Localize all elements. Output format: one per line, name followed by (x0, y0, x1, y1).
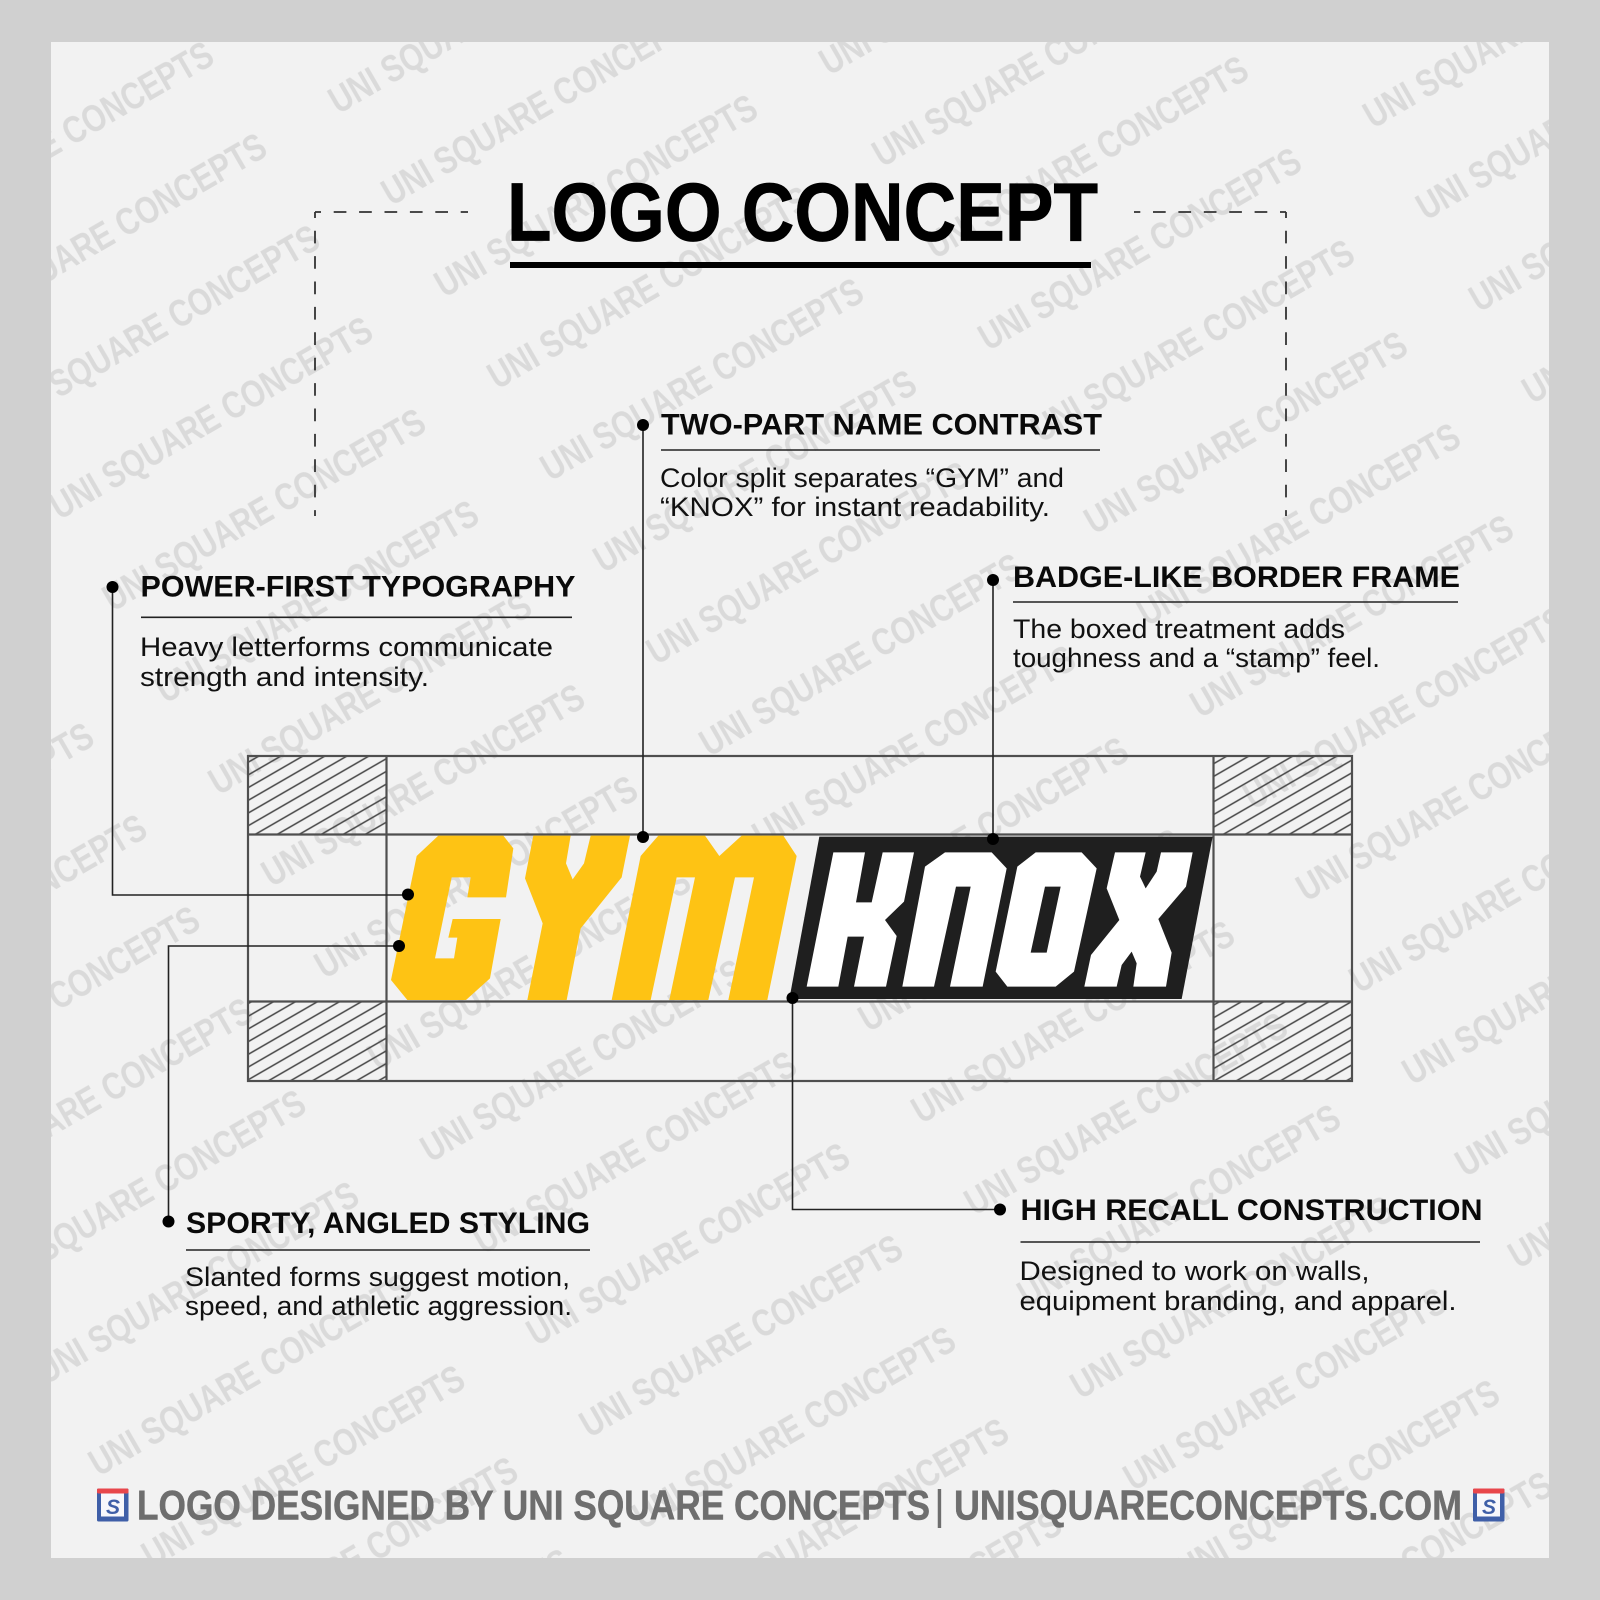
icon: left footer logo: S (106, 1496, 120, 1519)
callout: power-first typography (106, 570, 576, 900)
callout: badge-like border frame (987, 561, 1460, 845)
logo: KNOX badge (789, 837, 1213, 999)
callout: sporty, angled styling: SPORTY, ANGLED STYLING (186, 1207, 590, 1240)
callout: badge-like border frame: BADGE-LIKE BORDER FRAME (1013, 561, 1460, 594)
icon: left footer logo (97, 1488, 128, 1522)
construction grid (248, 756, 1352, 1081)
title: LOGO CONCEPT (507, 166, 1098, 258)
dashed bracket: right (1134, 212, 1286, 516)
callout: high recall construction (786, 992, 1482, 1316)
callout: two-part name contrast: “KNOX” for instant readability. (660, 492, 1050, 522)
callout: power-first typography: strength and intensity. (140, 662, 429, 692)
callout: high recall construction: HIGH RECALL CONSTRUCTION (1020, 1194, 1482, 1227)
icon: right footer logo: S (1482, 1496, 1496, 1519)
callout: high recall construction: equipment branding, and apparel. (1020, 1286, 1456, 1316)
footer credit: UNISQUARECONCEPTS.COM (954, 1482, 1462, 1528)
callout: sporty, angled styling (162, 940, 590, 1321)
callout: two-part name contrast (637, 408, 1102, 843)
callout: badge-like border frame: toughness and a “stamp” feel. (1013, 643, 1380, 673)
footer credit: LOGO DESIGNED BY UNI SQUARE CONCEPTS (137, 1482, 930, 1528)
callout: sporty, angled styling: Slanted forms suggest motion, (185, 1262, 570, 1292)
callout: badge-like border frame: The boxed treatment adds (1013, 614, 1345, 644)
footer credit: | (934, 1482, 945, 1528)
icon: right footer logo (1473, 1488, 1504, 1522)
callout: two-part name contrast: TWO-PART NAME CONTRAST (661, 408, 1102, 442)
dashed bracket: left (315, 212, 468, 516)
callout: high recall construction: Designed to work on walls, (1020, 1256, 1370, 1286)
callout: power-first typography: POWER-FIRST TYPOGRAPHY (140, 570, 576, 604)
callout: sporty, angled styling: speed, and athletic aggression. (185, 1291, 572, 1321)
callout: two-part name contrast: Color split separates “GYM” and (660, 463, 1064, 493)
callout: power-first typography: Heavy letterforms communicate (140, 632, 553, 662)
logo: GYM (391, 836, 797, 1000)
